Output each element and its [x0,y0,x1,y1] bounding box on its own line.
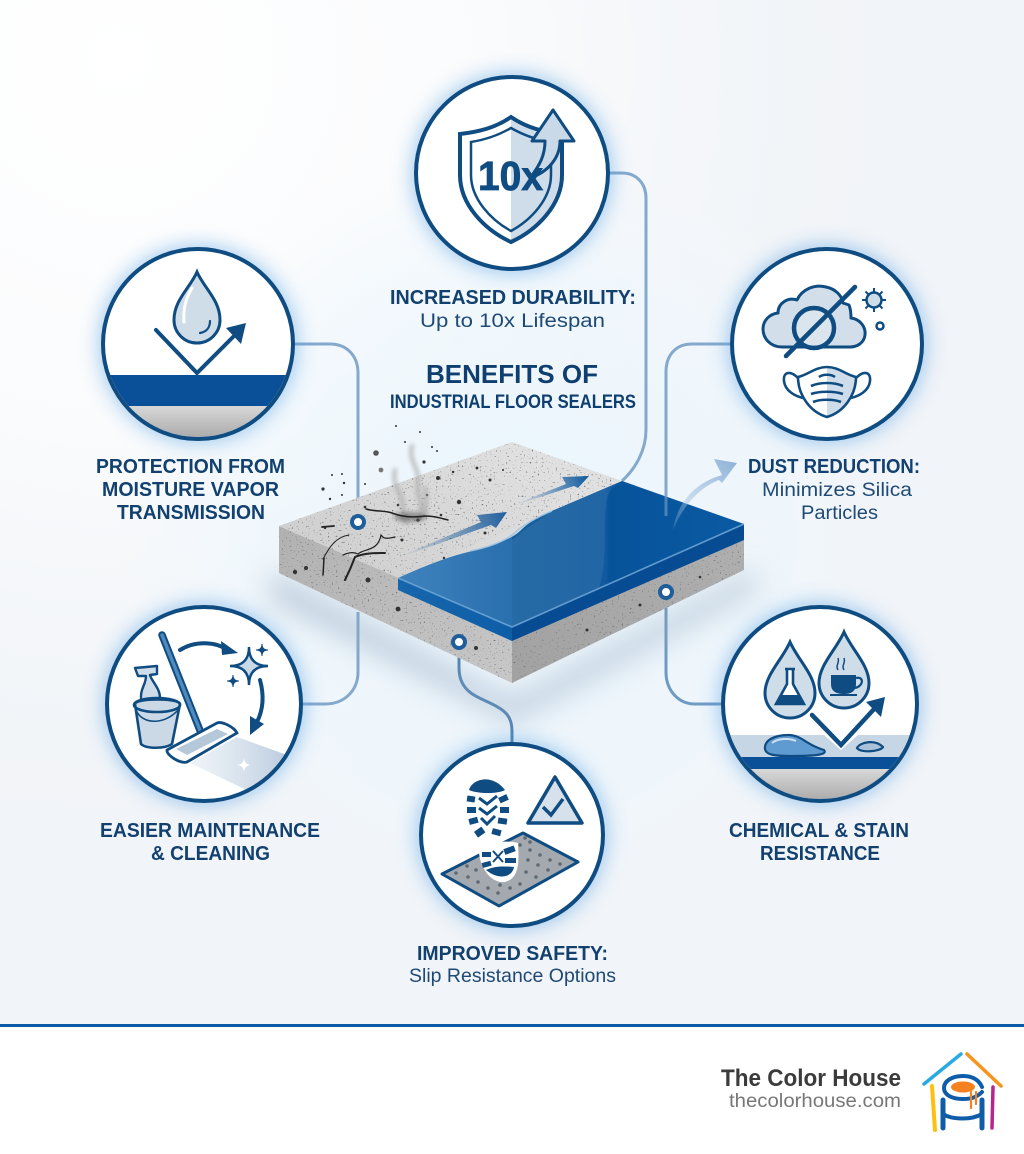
sealer left edge [398,578,512,641]
icon: shield with arrow [460,110,574,242]
brand url: thecolorhouse.com [729,1090,901,1112]
connector: maintenance [302,612,358,704]
sealer highlight line [398,524,744,627]
safety label: Slip Resistance Options [409,966,616,987]
footer rule [0,1024,1024,1027]
icon: mop [162,635,237,762]
safety label [409,943,616,987]
moisture label [96,456,285,524]
logo: house with paint can [924,1054,1001,1130]
moisture label: MOISTURE VAPOR [102,479,280,501]
surface layers [730,735,910,799]
surface arrows [403,476,589,556]
chemical label: CHEMICAL & STAIN [729,820,909,842]
surface layers [110,375,286,437]
connector: moisture [293,344,358,522]
footer [0,1024,1024,1154]
bucket rim [134,698,180,721]
panel: safety [417,740,607,930]
dust label: DUST REDUCTION: [748,456,920,478]
cracks [322,509,448,580]
connector: durability [609,173,646,481]
connector: safety [459,642,512,744]
slab left side [279,526,512,683]
sealer right edge [512,524,744,641]
moisture label: TRANSMISSION [117,502,265,524]
sealer gloss [512,481,622,627]
clean floor streak [190,737,284,790]
circle fill [107,607,301,801]
panel: moisture [99,245,300,443]
icon: cloud [763,286,865,347]
crack shadow [394,512,426,522]
title [390,359,636,413]
steam [394,446,426,522]
circle ring [103,249,293,439]
safety label: IMPROVED SAFETY: [417,943,608,965]
circle ring [723,607,917,801]
icon: slip mat [442,833,578,906]
icon: bucket [135,700,180,748]
circle glow [103,603,305,805]
circle [421,744,603,926]
icon: boot print lower [479,842,518,882]
durability label: Up to 10x Lifespan [420,311,605,332]
icon: shield with arrow: 10x [478,153,543,199]
circle fill [723,607,917,801]
icon: deflect arrow [812,697,885,745]
circle glow [412,73,612,273]
icon: boot print upper [467,778,509,840]
connector lines [293,173,731,744]
circle [732,249,922,439]
icon: mask [784,367,870,417]
circle [416,77,608,269]
icon: cycle arrows [180,641,264,735]
chemical label: RESISTANCE [760,843,880,865]
icon: sparkles [227,644,268,773]
circle glow [99,245,297,443]
circle glow [719,603,921,805]
circle ring [107,607,301,801]
icon: check triangle [528,777,582,823]
maintenance label: & CLEANING [151,843,270,865]
connector: chemical [666,592,722,704]
slab right side [512,524,744,683]
durability label: INCREASED DURABILITY: [390,287,636,309]
panel: maintenance [103,603,305,805]
slab top [279,442,744,627]
title: BENEFITS OF [426,359,598,389]
connector dots [352,516,672,648]
dust label: Minimizes Silica [762,480,912,501]
circle glow [417,740,607,930]
dust label [748,456,920,524]
dust label: Particles [801,503,878,524]
durability label [390,287,636,332]
chemical label [729,820,909,865]
dust connector over sealer [664,488,668,516]
icon: deflect arrow [156,323,246,373]
connector: dust [666,344,731,516]
icon: chemical drop [765,642,815,718]
title: INDUSTRIAL FLOOR SEALERS [390,392,636,413]
panel: chemical [719,603,921,805]
circle glow [728,245,926,443]
concrete slab illustration [270,425,756,722]
sealer edge highlight [470,511,552,551]
sealer top coat [398,481,744,627]
panel: dust [728,245,926,443]
moisture label: PROTECTION FROM [96,456,285,478]
maintenance label [100,820,320,865]
icon: coffee drop [819,632,869,708]
maintenance label: EASIER MAINTENANCE [100,820,320,842]
icon: particle [862,288,886,330]
panel: durability [412,73,612,273]
slab shadow [270,570,756,722]
brand name: The Color House [721,1065,901,1092]
icon: puddles [765,735,883,756]
icon: bottle [135,666,160,712]
dust specks [293,425,701,650]
dust arrow [673,459,737,530]
icon: water drop [174,272,220,343]
icon: prohibited ring [786,287,855,356]
circle fill [103,249,293,439]
